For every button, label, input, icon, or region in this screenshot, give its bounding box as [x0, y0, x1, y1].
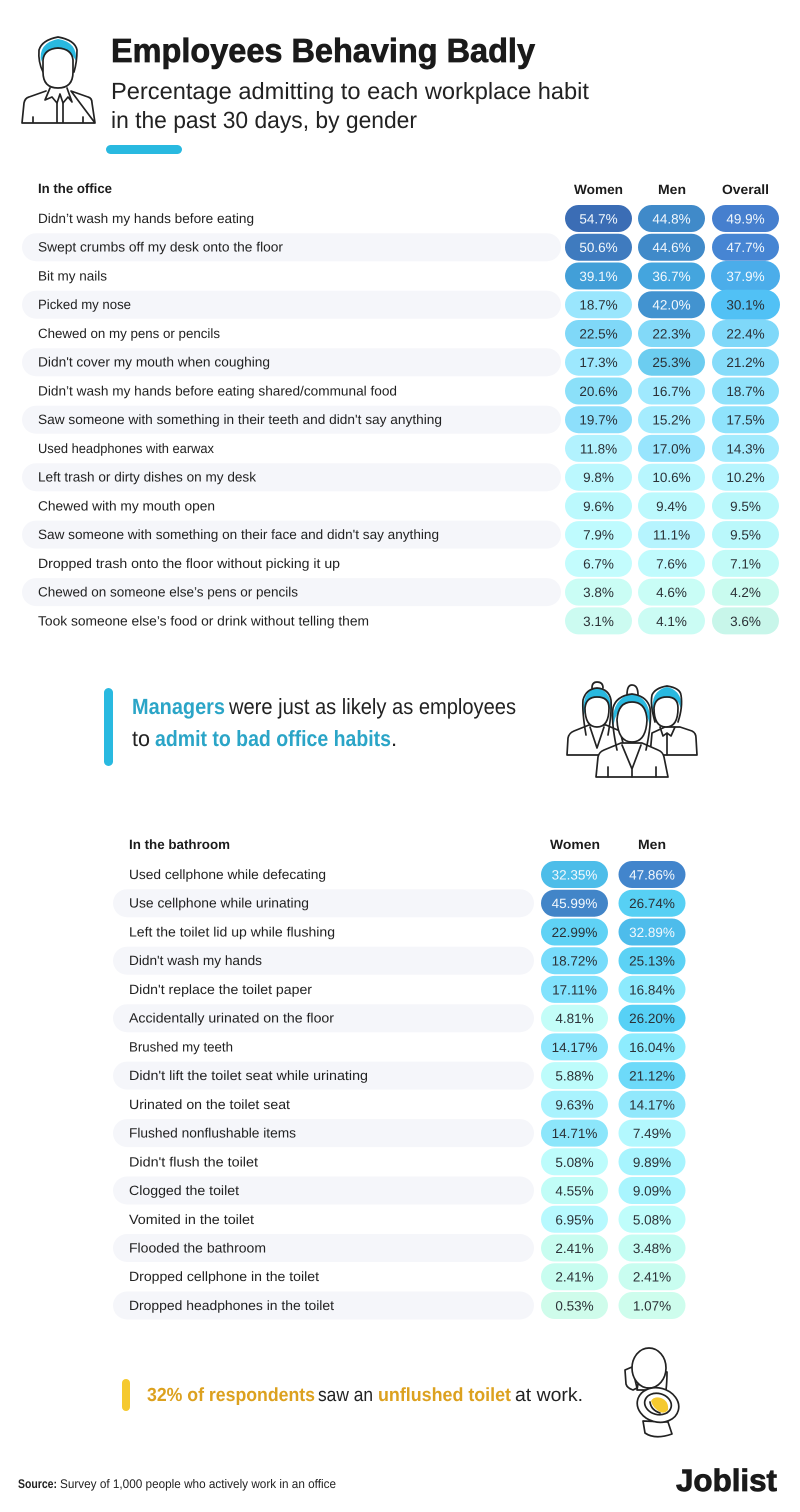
- row: someone else's pens: Chewed on someone else’s pens or pencils: [38, 585, 298, 600]
- row: dropped cellphone: 2.41%: [633, 1270, 671, 1285]
- row: took food: [38, 607, 779, 634]
- row: cellphone defecating: 47.86%: [629, 868, 675, 882]
- row: something in teeth: 17.5%: [726, 413, 765, 428]
- row: dropped headphones: Dropped headphones in the toilet: [129, 1298, 334, 1313]
- row: cellphone urinating: [113, 889, 686, 917]
- row: wash hands before eating: 44.8%: [652, 212, 691, 226]
- row: urinated on seat: 9.63%: [555, 1097, 594, 1112]
- row: swept crumbs: 47.7%: [726, 240, 765, 255]
- row: didn't wash hands: Didn't wash my hands: [129, 953, 262, 968]
- row: urinated on floor: 4.81%: [555, 1011, 594, 1026]
- row: chewed pens: Chewed on my pens or pencils: [38, 326, 220, 341]
- source note: Source:: [18, 1477, 57, 1491]
- row: dropped cellphone: 2.41%: [555, 1270, 594, 1285]
- row: cellphone urinating: 26.74%: [629, 896, 675, 911]
- row: chewed pens: 22.4%: [726, 326, 765, 342]
- row: flooded bathroom: [113, 1234, 686, 1262]
- row: nonflushable items: 7.49%: [633, 1126, 671, 1141]
- row: dropped trash: Dropped trash onto the floor without picking it up: [38, 556, 340, 571]
- row: bit nails: 36.7%: [652, 269, 691, 284]
- row: brushed teeth: 14.17%: [552, 1040, 597, 1055]
- table header: bathroom: In the bathroom: [129, 837, 230, 852]
- title: Employees Behaving Badly: [111, 33, 535, 70]
- row: didn't flush: [129, 1148, 686, 1175]
- row: wash hands before eating: [38, 205, 779, 232]
- row: cellphone defecating: Used cellphone while defecating: [129, 867, 326, 882]
- row: dropped trash: 6.7%: [583, 556, 614, 571]
- row: didn't flush: 5.08%: [555, 1155, 594, 1170]
- row: trash on desk: 10.2%: [726, 470, 765, 485]
- callout text: Managers: [132, 694, 225, 719]
- table header: office: In the office: [38, 181, 112, 196]
- row: clogged toilet: [113, 1176, 686, 1204]
- row: someone else's pens: 3.8%: [583, 585, 614, 600]
- callout text yellow: unflushed toilet: [378, 1385, 512, 1406]
- row: took food: 3.6%: [730, 614, 761, 629]
- row: wash hands before eating: 54.7%: [579, 212, 618, 226]
- row: toilet seat not lifted: Didn't lift the toilet seat while urinating: [129, 1068, 368, 1083]
- callout: unflushed toilet: [122, 1348, 683, 1437]
- row: flooded bathroom: 3.48%: [633, 1241, 671, 1256]
- header: [22, 33, 589, 154]
- row: dropped cellphone: [129, 1263, 686, 1290]
- row: toilet seat not lifted: 21.12%: [629, 1069, 675, 1084]
- row: something on face: 11.1%: [653, 528, 690, 543]
- row: urinated on floor: [113, 1004, 686, 1032]
- row: swept crumbs: Swept crumbs off my desk onto the floor: [38, 240, 284, 255]
- callout bar yellow: [122, 1379, 130, 1411]
- row: something in teeth: 15.2%: [652, 413, 691, 428]
- table header: office: Women: [574, 182, 623, 197]
- row: toilet lid up: 22.99%: [552, 925, 597, 940]
- row: bit nails: [38, 261, 780, 291]
- row: dropped cellphone: Dropped cellphone in the toilet: [129, 1269, 319, 1284]
- row: cellphone urinating: 45.99%: [552, 896, 597, 911]
- row: toilet seat not lifted: 5.88%: [555, 1069, 594, 1084]
- row: headphones earwax: [38, 435, 779, 462]
- row: communal food: 18.7%: [726, 384, 765, 399]
- row: urinated on floor: 26.20%: [629, 1011, 675, 1026]
- row: picked nose: 42.0%: [652, 298, 691, 313]
- row: didn't flush: 9.89%: [633, 1155, 671, 1170]
- row: toilet seat not lifted: [113, 1062, 686, 1090]
- row: toilet lid up: Left the toilet lid up while flushing: [129, 924, 335, 940]
- row: mouth open: Chewed with my mouth open: [38, 498, 215, 513]
- table header: bathroom: Men: [638, 837, 666, 852]
- row: didn't flush: Didn't flush the toilet: [129, 1154, 258, 1169]
- row: cellphone defecating: [129, 861, 686, 888]
- row: wash hands before eating: 49.9%: [726, 212, 765, 226]
- callout text: to: [132, 726, 150, 751]
- row: clogged toilet: Clogged the toilet: [129, 1183, 239, 1198]
- row: something in teeth: Saw someone with something in their teeth and didn't say anything: [38, 412, 442, 427]
- row: mouth open: 9.5%: [730, 499, 761, 514]
- row: dropped trash: 7.1%: [730, 556, 761, 571]
- row: someone else's pens: [22, 578, 779, 606]
- row: didn't wash hands: 18.72%: [552, 954, 597, 969]
- row: didn't wash hands: 25.13%: [629, 954, 675, 969]
- row: chewed pens: 22.5%: [579, 326, 618, 342]
- row: nonflushable items: [113, 1119, 686, 1147]
- row: took food: Took someone else’s food or drink without telling them: [38, 613, 369, 628]
- row: wash hands before eating: Didn’t wash my hands before eating: [38, 211, 254, 226]
- row: mouth open: 9.4%: [656, 499, 687, 514]
- row: picked nose: [22, 290, 780, 320]
- row: dropped trash: [38, 550, 779, 577]
- row: toilet paper: [129, 976, 686, 1003]
- row: picked nose: 30.1%: [726, 298, 765, 313]
- row: communal food: [38, 378, 779, 404]
- row: mouth open: 9.6%: [583, 499, 614, 514]
- table: in the bathroom: [113, 837, 686, 1320]
- callout text: .: [391, 726, 397, 751]
- row: something on face: [22, 521, 779, 549]
- row: dropped headphones: 0.53%: [555, 1298, 594, 1314]
- row: picked nose: Picked my nose: [38, 297, 131, 312]
- callout text yellow: saw an: [318, 1385, 373, 1406]
- row: flooded bathroom: 2.41%: [555, 1241, 594, 1256]
- row: mouth open: [38, 492, 779, 519]
- row: trash on desk: 10.6%: [652, 470, 691, 485]
- row: headphones earwax: 17.0%: [652, 441, 691, 456]
- row: something in teeth: [22, 406, 779, 434]
- row: took food: 4.1%: [656, 614, 687, 629]
- row: trash on desk: [22, 463, 779, 491]
- row: swept crumbs: [22, 233, 779, 261]
- row: chewed pens: 22.3%: [652, 326, 691, 342]
- callout: managers: [104, 682, 697, 777]
- row: nonflushable items: Flushed nonflushable items: [129, 1126, 296, 1141]
- table header: office: Overall: [722, 182, 769, 197]
- row: something on face: 7.9%: [583, 528, 614, 543]
- icon: group of managers: [567, 682, 697, 777]
- row: chewed pens: [38, 320, 779, 347]
- table header: office: Men: [658, 182, 686, 197]
- table: in the office: [22, 181, 780, 634]
- row: someone else's pens: 4.2%: [730, 585, 761, 600]
- accent bar: [106, 145, 182, 154]
- callout text: [132, 694, 516, 751]
- icon: male employee: [22, 37, 95, 123]
- row: coughing: 21.2%: [726, 355, 765, 370]
- row: dropped headphones: 1.07%: [633, 1298, 671, 1314]
- row: bit nails: Bit my nails: [38, 268, 107, 284]
- row: nonflushable items: 14.71%: [552, 1126, 597, 1141]
- source note: Survey of 1,000 people who actively work in an office: [60, 1477, 336, 1491]
- row: flooded bathroom: Flooded the bathroom: [129, 1240, 266, 1256]
- row: brushed teeth: Brushed my teeth: [129, 1039, 233, 1054]
- table header: bathroom: [129, 837, 666, 852]
- row: vomited: 5.08%: [633, 1212, 671, 1227]
- row: vomited: Vomited in the toilet: [129, 1212, 254, 1227]
- callout text yellow: [147, 1385, 583, 1406]
- row: vomited: 6.95%: [555, 1212, 594, 1227]
- subtitle: [111, 78, 589, 133]
- row: headphones earwax: Used headphones with earwax: [38, 441, 214, 456]
- subtitle: Percentage admitting to each workplace habit: [111, 78, 589, 104]
- subtitle: in the past 30 days, by gender: [111, 107, 417, 133]
- row: urinated on seat: [129, 1091, 686, 1118]
- row: something on face: Saw someone with something on their face and didn't say anything: [38, 527, 439, 542]
- row: coughing: Didn't cover my mouth when coughing: [38, 355, 270, 370]
- row: communal food: 20.6%: [579, 384, 618, 399]
- logo: Joblist: Joblist: [676, 1463, 777, 1498]
- row: something on face: 9.5%: [730, 528, 761, 543]
- row: bit nails: 39.1%: [579, 269, 618, 284]
- table header: bathroom: Women: [550, 837, 600, 852]
- row: cellphone defecating: 32.35%: [552, 868, 597, 882]
- row: communal food: Didn’t wash my hands before eating shared/communal food: [38, 384, 397, 398]
- row: trash on desk: Left trash or dirty dishes on my desk: [38, 470, 256, 485]
- row: coughing: 25.3%: [652, 355, 691, 370]
- callout text: were just as likely as employees: [228, 694, 516, 719]
- row: something in teeth: 19.7%: [579, 413, 618, 428]
- callout text: admit to bad office habits: [155, 726, 391, 751]
- icon: toilet: [625, 1348, 683, 1437]
- row: urinated on floor: Accidentally urinated on the floor: [129, 1011, 335, 1026]
- row: swept crumbs: 50.6%: [579, 240, 618, 255]
- row: brushed teeth: 16.04%: [629, 1040, 675, 1055]
- row: trash on desk: 9.8%: [583, 470, 614, 485]
- row: dropped headphones: [113, 1292, 686, 1320]
- row: urinated on seat: 14.17%: [629, 1097, 675, 1112]
- row: cellphone urinating: Use cellphone while urinating: [129, 896, 309, 911]
- callout text yellow: 32% of respondents: [147, 1385, 315, 1406]
- row: urinated on seat: Urinated on the toilet seat: [129, 1097, 290, 1112]
- row: headphones earwax: 11.8%: [580, 441, 617, 456]
- row: took food: 3.1%: [583, 614, 614, 629]
- row: vomited: [129, 1206, 686, 1233]
- row: clogged toilet: 9.09%: [633, 1184, 671, 1198]
- callout bar: [104, 688, 113, 766]
- row: swept crumbs: 44.6%: [652, 240, 691, 255]
- row: picked nose: 18.7%: [579, 298, 618, 313]
- row: coughing: [22, 348, 779, 376]
- row: bit nails: 37.9%: [726, 269, 765, 284]
- row: toilet paper: 17.11%: [552, 982, 597, 997]
- table header: office: [38, 181, 769, 197]
- row: toilet paper: 16.84%: [629, 982, 675, 997]
- row: toilet paper: Didn't replace the toilet paper: [129, 982, 313, 997]
- row: communal food: 16.7%: [652, 384, 691, 399]
- row: clogged toilet: 4.55%: [555, 1184, 594, 1198]
- row: brushed teeth: [129, 1033, 686, 1060]
- row: toilet lid up: 32.89%: [629, 925, 675, 940]
- row: didn't wash hands: [113, 947, 686, 975]
- row: headphones earwax: 14.3%: [726, 441, 765, 456]
- row: someone else's pens: 4.6%: [656, 585, 687, 600]
- callout text yellow: at work.: [515, 1385, 583, 1406]
- row: toilet lid up: [129, 918, 686, 946]
- row: dropped trash: 7.6%: [656, 556, 687, 571]
- row: coughing: 17.3%: [579, 355, 618, 370]
